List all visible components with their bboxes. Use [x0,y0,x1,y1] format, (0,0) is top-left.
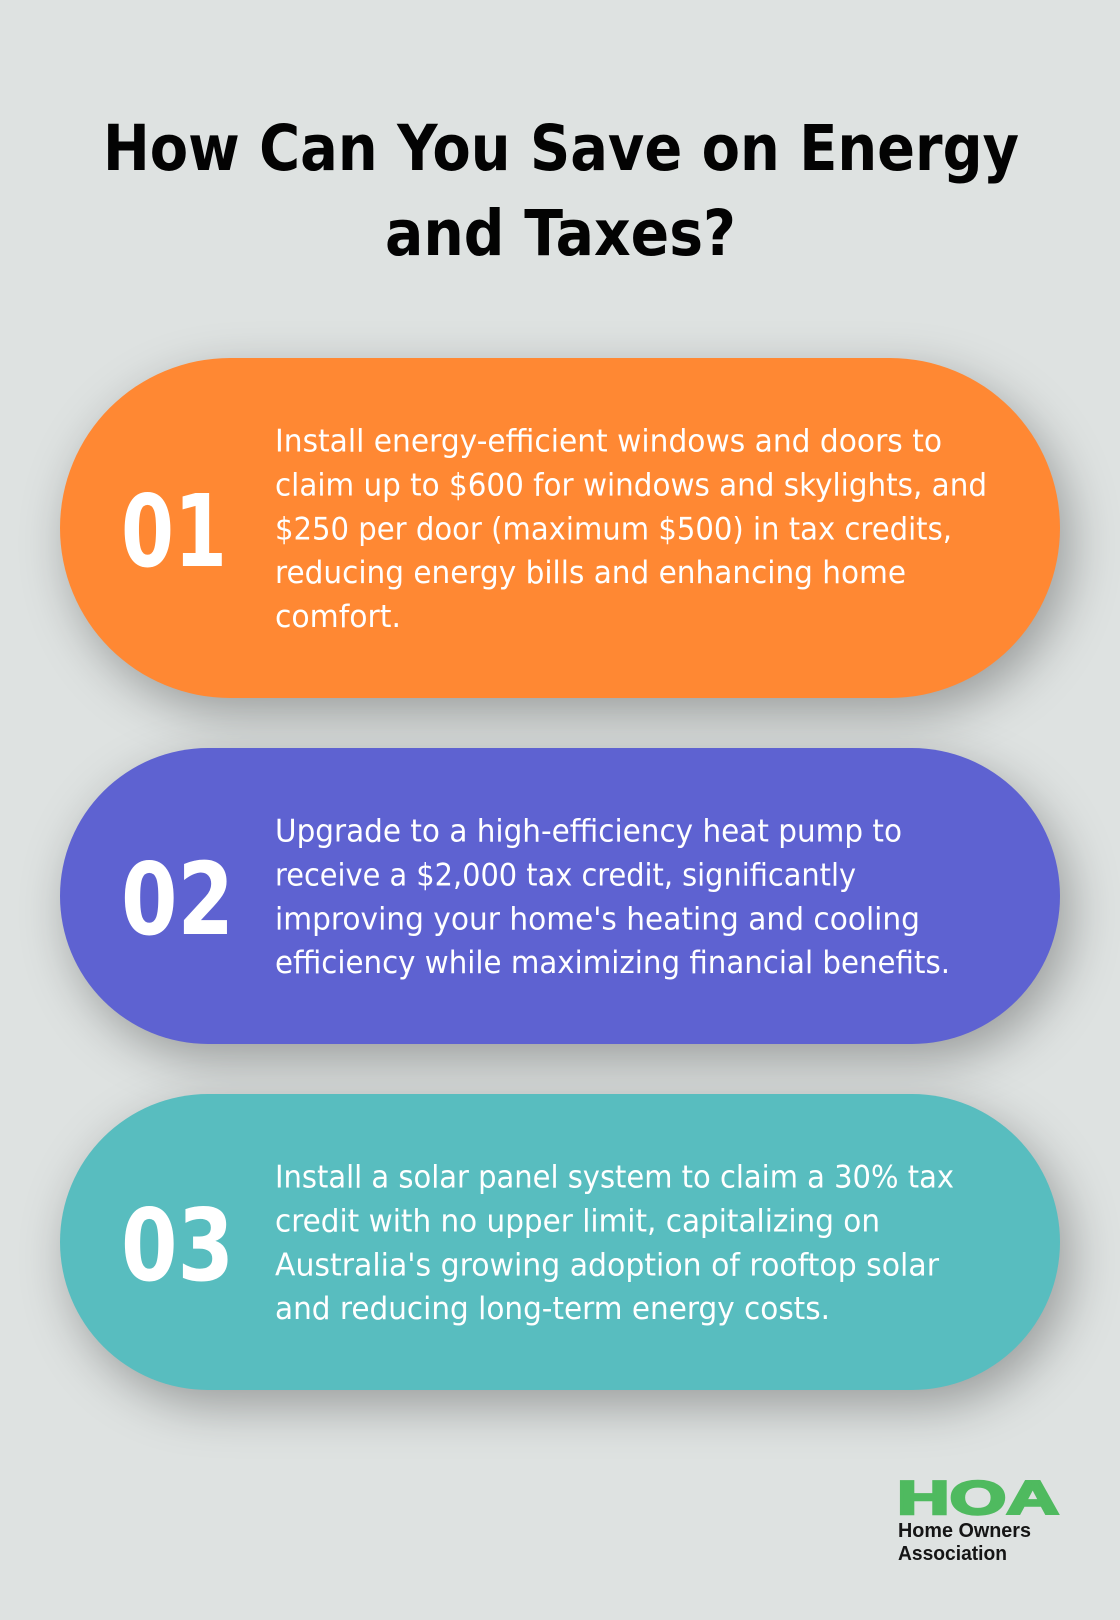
step 03 description: Install a solar panel system to claim a 30% tax [275,1160,954,1196]
step 03 description [275,1160,954,1327]
panel: step 01 [60,358,1060,698]
step 01 description: Install energy-efficient windows and doors to [275,424,942,460]
step 03 description: Australia's growing adoption of rooftop solar [275,1248,939,1284]
step 01 description: comfort. [275,599,401,635]
step 03 description: credit with no upper limit, capitalizing on [275,1204,880,1240]
step 02 description: receive a $2,000 tax credit, significantly [275,858,856,894]
step 03 description: and reducing long-term energy costs. [275,1291,830,1327]
logo: HOA Home Owners Association [897,1471,1059,1565]
step 01 description: reducing energy bills and enhancing home [275,555,906,591]
title [103,112,1019,270]
step 02 description: improving your home's heating and cooling [275,902,920,938]
step 02 description: Upgrade to a high-efficiency heat pump to [275,814,902,850]
purple pill background [60,748,1060,1044]
step 01 description [275,424,987,635]
step 02 description: efficiency while maximizing financial benefits. [275,945,950,981]
number 03: 03 [121,1187,234,1304]
title: How Can You Save on Energy [103,112,1019,185]
title: and Taxes? [385,197,736,270]
panel: step 03 [60,1094,1060,1390]
step 02 description [275,814,950,981]
panel: step 02 [60,748,1060,1044]
logo: HOA Home Owners Association: Home Owners [898,1520,1031,1542]
logo: HOA Home Owners Association: HOA [897,1471,1059,1524]
number 01: 01 [121,473,227,590]
teal pill background [60,1094,1060,1390]
step 01 description: $250 per door (maximum $500) in tax credits, [275,512,952,548]
logo: HOA Home Owners Association: Association [898,1543,1007,1565]
orange pill background [60,358,1060,698]
step 01 description: claim up to $600 for windows and skylights, and [275,468,987,504]
number 02: 02 [121,841,234,958]
